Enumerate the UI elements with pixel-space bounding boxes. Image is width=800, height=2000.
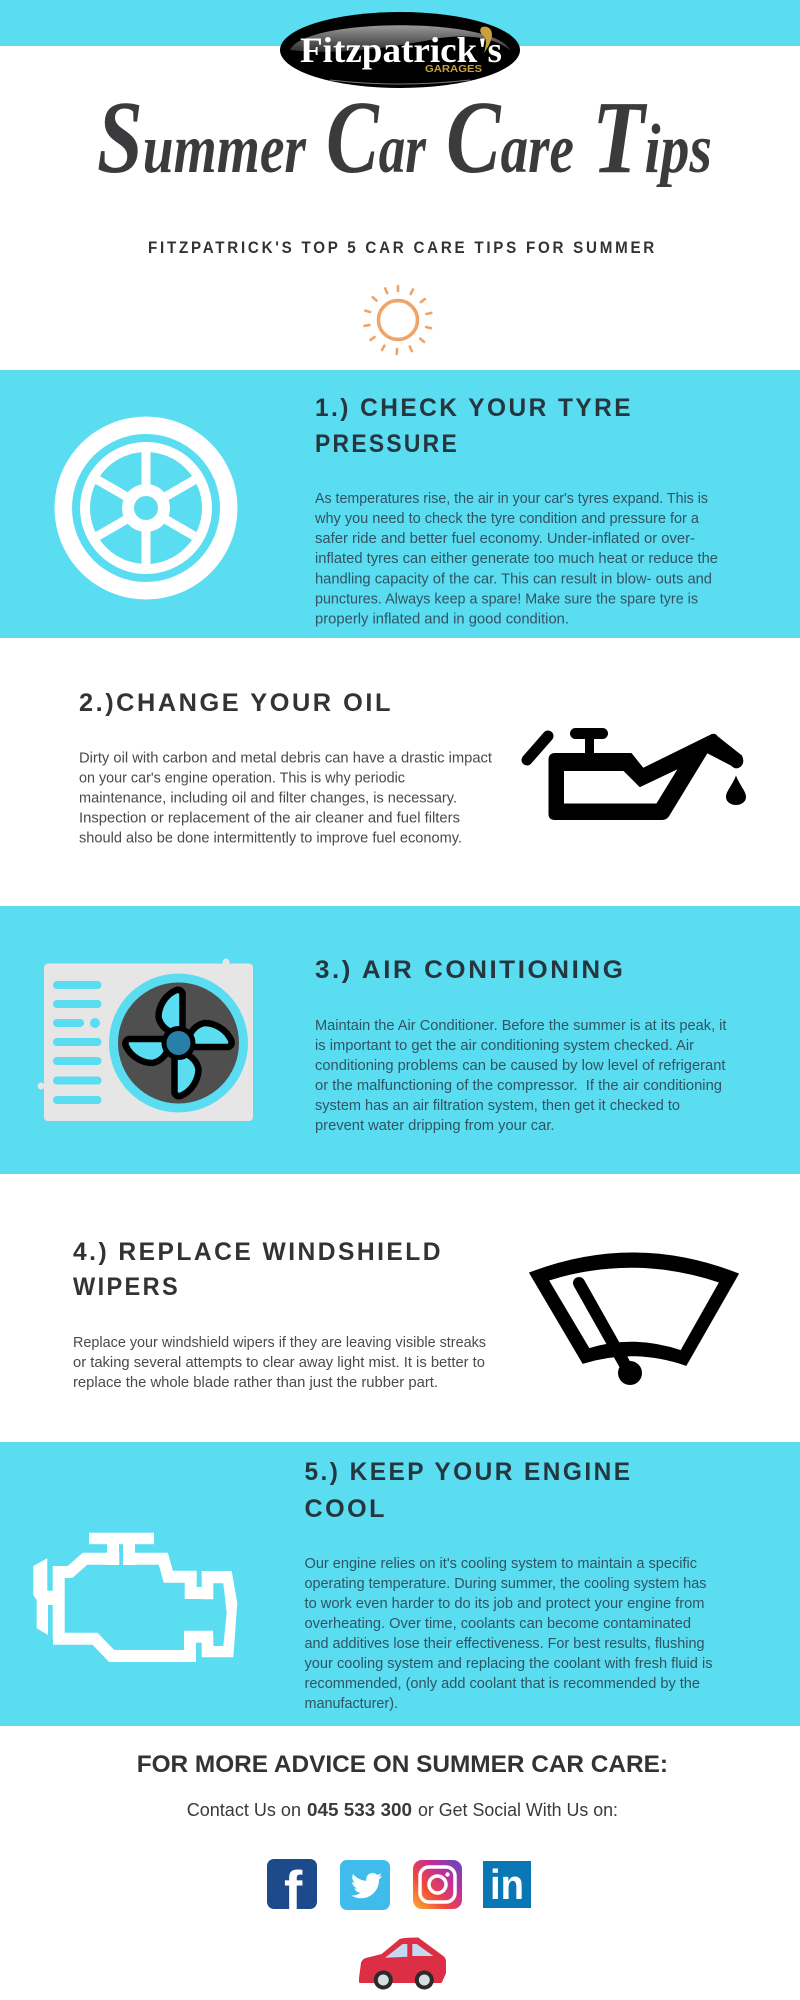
body text: Inspection or replacement of the air cleaner and fuel filters (79, 810, 460, 826)
body text (73, 1335, 486, 1391)
body text: prevent water dripping from your car. (315, 1118, 554, 1134)
title (97, 80, 712, 195)
body text: conditioning problems can be caused by low level of refrigerant (315, 1058, 726, 1074)
title: Car (326, 80, 427, 195)
heading (304, 1458, 632, 1523)
body text: punctures. Always keep a spare! Make sure the spare tyre is (315, 592, 698, 608)
heading (315, 394, 633, 458)
icon: wheel (54, 416, 238, 600)
body text: recommended, (only add coolant that is recommended by the (304, 1676, 700, 1692)
body text: or taking several attempts to clear away light mist. It is better to (73, 1355, 485, 1371)
heading: 3.) AIR CONITIONING (315, 956, 626, 984)
panel: tip 4 windshield wipers (73, 1238, 738, 1391)
body text: properly inflated and in good condition. (315, 612, 569, 628)
body text (304, 1556, 712, 1712)
footer heading: FOR MORE ADVICE ON SUMMER CAR CARE: (137, 1751, 668, 1778)
body text: on your car's engine operation. This is why periodic (79, 770, 405, 786)
body text: operating temperature. During summer, the cooling system has (304, 1576, 706, 1592)
body text (79, 750, 492, 846)
body text: why you need to check the tyre condition and pressure for a (314, 511, 700, 527)
heading: COOL (304, 1495, 387, 1523)
body text: As temperatures rise, the air in your car's tyres expand. This is (315, 491, 708, 507)
heading: 4.) REPLACE WINDSHIELD (73, 1238, 443, 1266)
icon: sun (365, 286, 431, 354)
heading (73, 1238, 443, 1301)
panel: tip 2 change your oil (79, 689, 746, 846)
subtitle: FITZPATRICK'S TOP 5 CAR CARE TIPS FOR SUMMER (148, 239, 657, 257)
body text: and additives lose their effectiveness. For best results, flushing (304, 1636, 704, 1652)
logo: Fitzpatrick's Garages: Fitzpatrick's (300, 30, 502, 70)
body text: or the malfunctioning of the compressor. If the air conditioning (315, 1078, 722, 1094)
icon: air conditioner unit (38, 958, 253, 1121)
panel: tip 5 engine cool (0, 1442, 800, 1726)
body text: Our engine relies on it's cooling system to maintain a specific (304, 1556, 697, 1572)
body text: to work even harder to do its job and protect your engine from (304, 1596, 704, 1612)
contact line: Contact Us on (187, 1799, 301, 1820)
heading: PRESSURE (315, 430, 459, 458)
contact line (187, 1799, 618, 1820)
body text: maintenance, including oil and filter changes, is necessary. (79, 790, 457, 806)
body text: system has an air filtration system, then get it checked to (315, 1098, 680, 1114)
title: Summer (97, 80, 307, 195)
body text: inflated tyres can either generate too much heat or reduce the (315, 551, 718, 567)
body text: Dirty oil with carbon and metal debris can have a drastic impact (79, 750, 492, 766)
icon: engine (33, 1533, 237, 1657)
title: Care (446, 80, 574, 195)
body text: is important to get the air conditioning system checked. Air (315, 1038, 694, 1054)
top banner (0, 0, 800, 46)
heading: WIPERS (73, 1273, 180, 1301)
logo: Fitzpatrick's Garages (280, 12, 520, 88)
title: Tips (592, 80, 712, 195)
body text: safer ride and better fuel economy. Under-inflated or over- (315, 531, 695, 547)
body text: your cooling system and replacing the coolant with fresh fluid is (304, 1656, 712, 1672)
body text: handling capacity of the car. This can result in blow- outs and (315, 572, 712, 588)
body text: Replace your windshield wipers if they are leaving visible streaks (73, 1335, 486, 1351)
contact line: or Get Social With Us on: (418, 1799, 618, 1820)
panel: tip 3 air conditioning (0, 906, 800, 1174)
icon: instagram (413, 1860, 462, 1909)
icon: oil can (527, 728, 746, 819)
body text: Maintain the Air Conditioner. Before the summer is at its peak, it (315, 1018, 726, 1034)
panel: tip 1 tyre pressure (0, 370, 800, 638)
icon: twitter (340, 1860, 390, 1910)
contact line: 045 533 300 (307, 1799, 412, 1820)
heading: 2.)CHANGE YOUR OIL (79, 689, 393, 717)
body text: overheating. Over time, coolants can become contaminated (304, 1616, 691, 1632)
heading: 1.) CHECK YOUR TYRE (315, 394, 633, 422)
body text (314, 491, 718, 628)
body text: should also be done intermittently to improve fuel economy. (79, 830, 462, 846)
icon: windshield wiper (530, 1253, 738, 1385)
body text (315, 1018, 726, 1134)
body text: manufacturer). (304, 1696, 398, 1712)
social icons (267, 1859, 531, 1921)
heading: 5.) KEEP YOUR ENGINE (304, 1458, 632, 1486)
icon: linkedin: in (490, 1861, 524, 1908)
icon: facebook: f (284, 1859, 303, 1921)
body text: replace the whole blade rather than just the rubber part. (73, 1375, 438, 1391)
logo: Fitzpatrick's Garages: GARAGES (425, 63, 482, 75)
icon: red car (360, 1938, 445, 1990)
icon: facebook (267, 1859, 317, 1921)
